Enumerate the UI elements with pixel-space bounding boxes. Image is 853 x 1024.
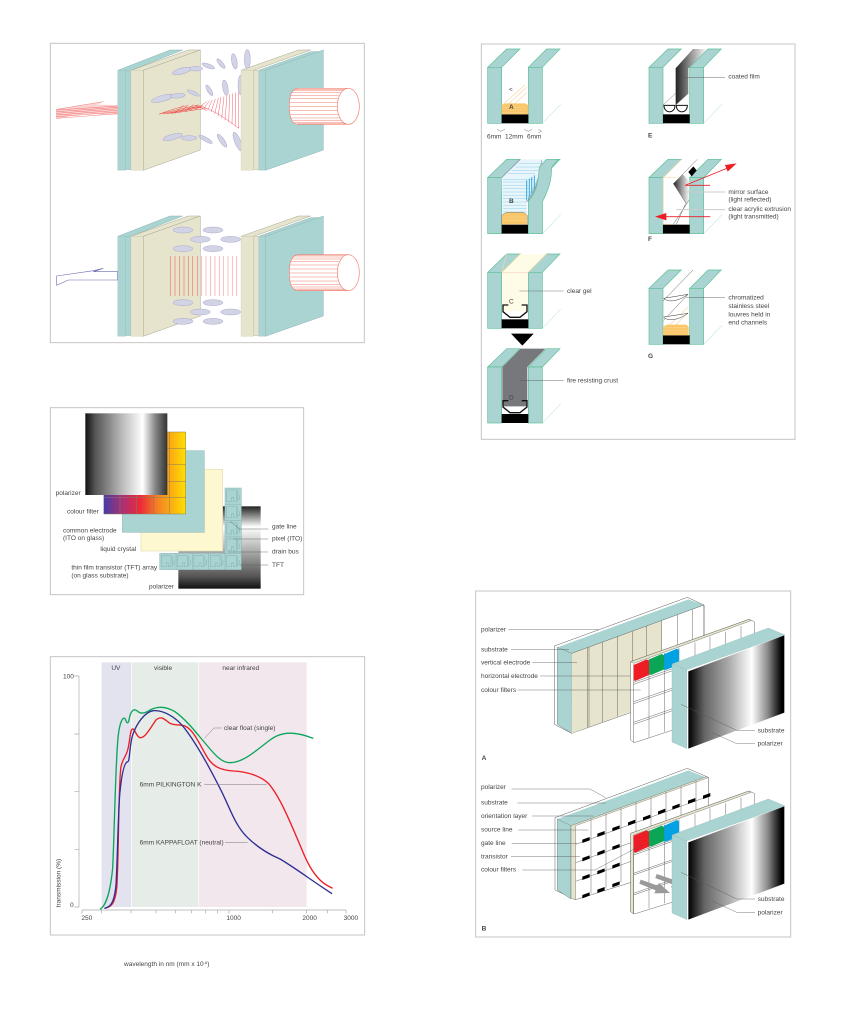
view A labels: A — [482, 755, 487, 762]
layer labels: drain bus — [272, 549, 300, 556]
vertical electrodes — [572, 621, 662, 733]
layer labels: liquid crystal — [100, 546, 137, 553]
curve: Kappafloat — [104, 711, 332, 908]
unit F: (light transmitted) — [728, 214, 779, 221]
view B labels: source line — [481, 826, 513, 833]
unit A: 6mm — [527, 134, 541, 141]
view B labels: polarizer — [481, 784, 507, 791]
view B labels — [481, 784, 785, 932]
unit F: mirror surface — [728, 189, 769, 196]
unit G: chromatized — [728, 295, 764, 302]
common electrode — [122, 451, 204, 532]
panel: passive and active matrix exploded views — [476, 591, 791, 937]
view A labels: colour filters — [481, 687, 517, 694]
unit F: clear acrylic extrusion — [728, 206, 791, 213]
unit A — [487, 49, 561, 141]
x axis: 2000 — [302, 915, 317, 922]
arrow: gel turns to crust — [511, 334, 534, 346]
spectral bands: visible — [154, 665, 172, 672]
top polarizer — [85, 413, 167, 495]
view B labels: substrate — [481, 800, 508, 807]
unit D — [488, 349, 618, 423]
polarized light beam in — [57, 102, 118, 119]
unit A: < — [509, 87, 513, 94]
unit G: louvres held in — [728, 311, 771, 318]
spectral bands — [102, 662, 307, 907]
panel: LCD twist cell off and on states — [50, 43, 364, 343]
bottom cell: light blocked state — [57, 216, 359, 336]
unit F: (light reflected) — [728, 197, 771, 204]
unit E — [648, 49, 760, 139]
x axis: ) — [207, 961, 209, 968]
unit E: coated film — [728, 74, 760, 81]
view A labels: polarizer — [758, 741, 783, 748]
view A: passive matrix — [481, 597, 785, 762]
back plate with transistors — [555, 768, 708, 900]
unit D: D — [509, 395, 514, 402]
unit E: E — [648, 132, 653, 139]
layer labels: common electrode — [63, 527, 117, 534]
unit B — [488, 159, 561, 234]
y axis: 0 — [70, 902, 74, 909]
top cell: light twisted through liquid crystal — [57, 49, 359, 170]
panel: glazing units A to G — [481, 44, 795, 439]
y axis — [56, 673, 79, 909]
x axis — [81, 910, 359, 968]
view A labels: substrate — [758, 728, 785, 735]
twisting light rays — [159, 105, 207, 114]
layer labels — [56, 490, 302, 590]
grey light arrows — [639, 880, 670, 893]
x axis: -6 — [204, 960, 208, 965]
unit G: stainless steel — [728, 303, 770, 310]
middle colour filter grid — [631, 791, 754, 914]
x axis: 3000 — [344, 915, 359, 922]
unit B: B — [509, 198, 514, 205]
middle colour filter grid — [631, 619, 754, 743]
curve labels: 6mm PILKINGTON K — [140, 781, 202, 788]
RGB cells — [634, 830, 649, 853]
view A labels: substrate — [481, 646, 508, 653]
view B labels: polarizer — [758, 909, 783, 916]
spectral bands: near infrared — [222, 665, 260, 672]
view A labels: polarizer — [481, 626, 507, 633]
layer labels: polarizer — [149, 583, 175, 590]
colour filter — [104, 432, 186, 514]
unit G: end channels — [728, 320, 768, 327]
layer labels: colour filter — [67, 509, 100, 516]
x axis: wavelength in nm (mm x 10 — [124, 961, 204, 968]
unit D: fire resisting crust — [567, 377, 618, 384]
layer labels: (on glass substrate) — [71, 573, 129, 580]
layer labels: (ITO on glass) — [63, 535, 104, 542]
unit A: 12mm — [505, 134, 523, 141]
unit G: G — [648, 353, 653, 360]
unit C — [488, 254, 592, 328]
RGB cells — [634, 659, 649, 681]
layer labels: pixel (ITO) — [272, 536, 302, 543]
liquid crystal molecules aligned — [173, 227, 241, 324]
curve labels: clear float (single) — [224, 725, 275, 732]
y axis: 100 — [63, 673, 74, 680]
y axis: transmission (%) — [56, 859, 63, 907]
view B labels: colour filters — [481, 867, 517, 874]
panel: TFT LCD layer stack — [50, 408, 304, 595]
unit F — [648, 159, 791, 243]
bottom polarizer — [178, 506, 261, 589]
TFT array — [160, 488, 241, 570]
x axis: 250 — [81, 915, 93, 922]
unit A: A — [509, 104, 514, 111]
vertical red rays — [170, 256, 197, 296]
spectral bands: UV — [111, 665, 121, 672]
x axis: 1000 — [226, 915, 241, 922]
liquid crystal layer — [141, 469, 223, 551]
view B labels: substrate — [758, 896, 785, 903]
curve: Pilkington K — [105, 718, 333, 908]
view A labels — [481, 626, 785, 762]
curve: clear float — [100, 707, 313, 909]
view B labels: gate line — [481, 840, 506, 847]
back plate — [554, 597, 704, 733]
layer labels: gate line — [272, 524, 297, 531]
layer labels: thin film transistor (TFT) array — [71, 565, 158, 572]
curve labels: 6mm KAPPAFLOAT (neutral) — [140, 840, 224, 847]
blue input beam — [57, 268, 118, 285]
view B labels: orientation layer — [481, 813, 528, 820]
view A labels: horizontal electrode — [481, 673, 538, 680]
view B labels: B — [482, 925, 487, 932]
layer labels: TFT — [272, 562, 284, 569]
view B labels: transistor — [481, 853, 509, 860]
layer labels: polarizer — [56, 490, 81, 497]
unit C: C — [509, 298, 514, 305]
unit F: F — [648, 236, 652, 243]
panel: transmission chart — [50, 657, 365, 968]
unit A: 6mm — [487, 134, 501, 141]
unit C: clear gel — [567, 288, 592, 295]
curve labels — [140, 725, 275, 847]
unit G — [648, 270, 771, 360]
view A labels: vertical electrode — [481, 660, 531, 667]
view B: active matrix — [481, 768, 785, 932]
liquid crystal molecules twisted — [151, 49, 250, 152]
